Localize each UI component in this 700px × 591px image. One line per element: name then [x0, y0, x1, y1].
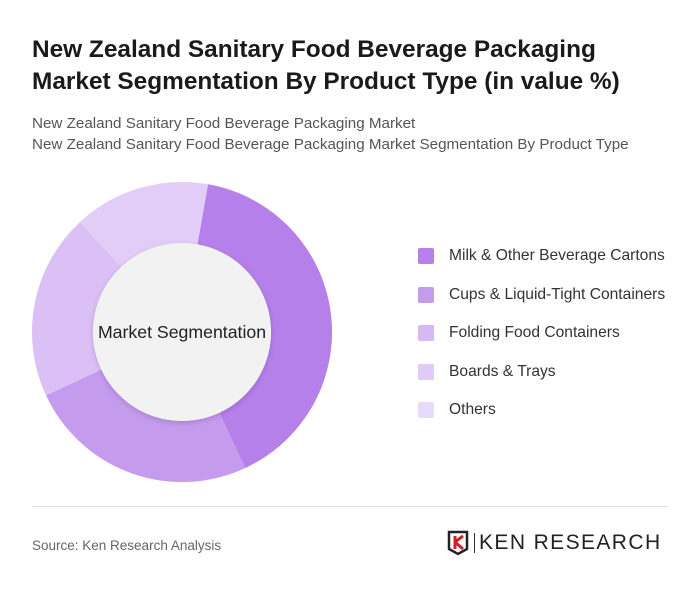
legend: Folding Food Containers [449, 324, 620, 341]
legend [418, 247, 665, 418]
subtitle: New Zealand Sanitary Food Beverage Packaging Market [32, 115, 415, 132]
title [32, 36, 620, 95]
title: Market Segmentation By Product Type (in value %) [32, 68, 620, 95]
source: Source: Ken Research Analysis [32, 538, 221, 553]
legend: Milk & Other Beverage Cartons [449, 247, 665, 264]
logo: KEN RESEARCH [479, 531, 662, 554]
donut chart: Market Segmentation [98, 322, 266, 342]
title: New Zealand Sanitary Food Beverage Packaging [32, 36, 596, 63]
subtitle: New Zealand Sanitary Food Beverage Packaging Market Segmentation By Product Type [32, 136, 629, 153]
legend: Others [449, 401, 496, 418]
legend: Cups & Liquid-Tight Containers [449, 286, 665, 303]
legend: Boards & Trays [449, 363, 556, 380]
subtitle [32, 115, 629, 153]
